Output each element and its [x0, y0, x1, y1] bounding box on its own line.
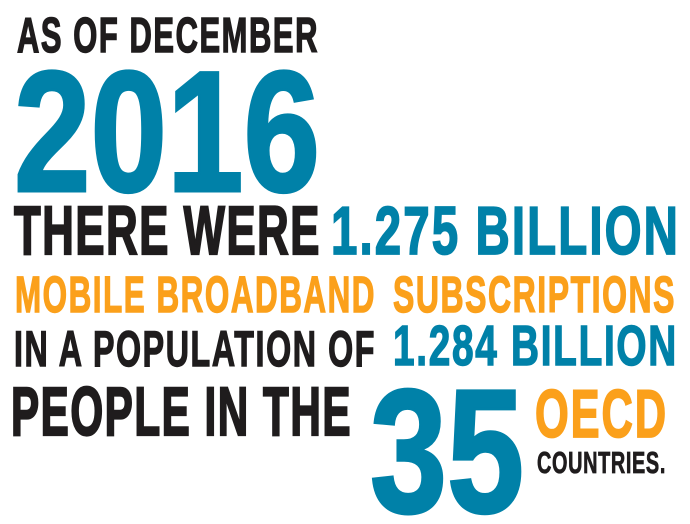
text: mobile broadband: MOBILE BROADBAND: [15, 266, 376, 323]
text: in a population of: IN A POPULATION OF: [14, 321, 376, 377]
text: there were: THERE WERE: [14, 192, 321, 269]
heading: as of December: AS OF DECEMBER: [17, 9, 319, 63]
big year: 2016: 2016: [14, 36, 320, 228]
text: people in the: PEOPLE IN THE: [11, 373, 352, 450]
